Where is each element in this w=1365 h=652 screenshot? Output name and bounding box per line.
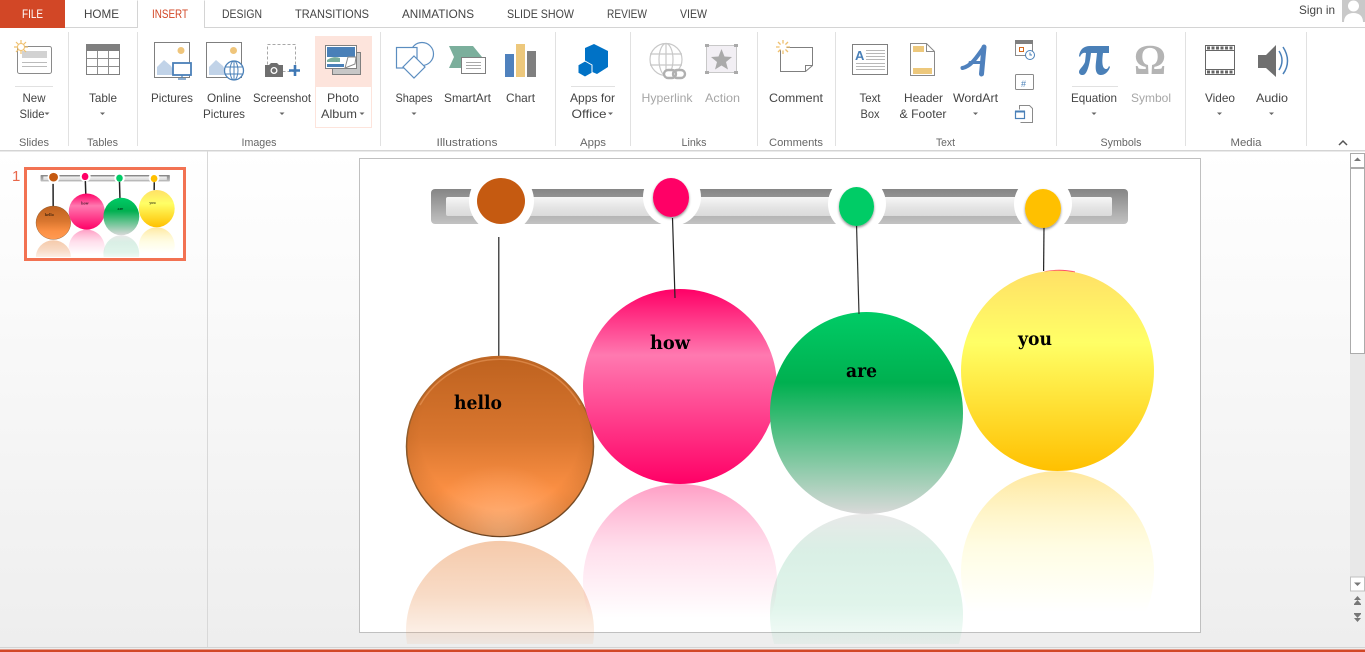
group: Text <box>852 40 1034 149</box>
group: Symbols <box>1071 38 1171 149</box>
group: Text: WordArt <box>953 91 999 105</box>
icon: SmartArt <box>449 46 486 74</box>
icon: comment <box>776 40 812 72</box>
group: Tables: Tables <box>87 137 118 149</box>
slide thumbnail: hello <box>45 213 54 217</box>
group: Images: Images <box>242 137 277 149</box>
icon: symbol omega: Ω <box>1134 38 1166 84</box>
icon: screenshot <box>265 44 300 77</box>
scroll down button <box>1350 577 1364 591</box>
group: Apps: Apps for <box>570 91 615 105</box>
string: how <box>672 218 675 298</box>
group: Text: Text <box>936 137 955 149</box>
group: Symbols: Symbol <box>1131 91 1171 105</box>
group: Slides: Slides <box>19 137 49 149</box>
icon: hyperlink <box>650 44 685 78</box>
peg: you <box>1025 189 1061 228</box>
ball: you: you <box>1017 328 1052 350</box>
group: Text: Box <box>860 107 880 121</box>
group: Comments: Comments <box>769 137 823 149</box>
string: you <box>1043 226 1045 271</box>
ball: how <box>583 289 777 484</box>
icon: shapes <box>396 42 434 78</box>
group: Illustrations: SmartArt <box>444 91 492 105</box>
string: are <box>856 224 859 314</box>
ball: hello <box>406 356 594 536</box>
group: Media: Video <box>1205 91 1235 105</box>
ball: how: how <box>650 332 691 354</box>
thumbnail panel divider <box>207 151 208 648</box>
group: Slides: New <box>22 91 46 105</box>
icon: object <box>1015 106 1032 122</box>
halo: hello peg <box>469 168 534 234</box>
peg: how <box>653 178 689 217</box>
tab bar: SLIDE SHOW <box>507 7 575 21</box>
icon: apps for office <box>578 44 608 77</box>
tab bar: DESIGN <box>222 7 262 21</box>
group: Links: Hyperlink <box>642 91 694 105</box>
slide thumbnail <box>26 168 184 260</box>
group: Media: Audio <box>1256 91 1288 105</box>
ball: are <box>770 312 963 514</box>
icon: photo album <box>326 46 360 74</box>
previous slide button <box>1354 596 1361 605</box>
icon: pictures <box>154 42 191 79</box>
group: Images: Online <box>207 91 241 105</box>
photo album button <box>315 36 372 128</box>
halo: you peg <box>1014 175 1072 233</box>
group: Media: Media <box>1230 137 1262 149</box>
scroll thumb <box>1350 168 1364 354</box>
icon: video <box>1205 46 1235 74</box>
icon: date and time <box>1015 40 1034 60</box>
group: Tables: Table <box>89 91 117 105</box>
group: Slides: Slide <box>20 107 45 121</box>
peg: hello <box>477 178 525 224</box>
scroll up button <box>1350 154 1364 168</box>
tab bar: ANIMATIONS <box>402 7 474 21</box>
active INSERT tab: INSERT <box>152 7 189 21</box>
halo: are peg <box>828 175 886 233</box>
group: Links: Action <box>705 91 740 105</box>
ribbon <box>0 28 1365 152</box>
status bar edge <box>0 647 1365 652</box>
peg: are <box>839 187 874 226</box>
group: Slides <box>14 40 52 149</box>
group: Images: Pictures <box>203 107 245 121</box>
photo album button: Album <box>321 107 357 121</box>
group: Links <box>642 44 740 149</box>
group: Illustrations <box>396 42 536 149</box>
icon: slide number <box>1016 74 1034 90</box>
slide canvas <box>360 158 1200 632</box>
slide thumbnail: you <box>149 201 156 205</box>
reflection: hello ball <box>406 541 594 644</box>
group: Symbols: Equation <box>1071 91 1117 105</box>
group: Tables <box>86 44 120 149</box>
group: Illustrations: Shapes <box>396 91 432 105</box>
slide number: 1 <box>12 168 20 185</box>
reflection: you ball <box>961 471 1154 615</box>
halo: how peg <box>643 168 701 226</box>
group: Apps: Apps <box>580 137 607 149</box>
active INSERT tab <box>138 0 204 29</box>
tab bar: TRANSITIONS <box>295 7 369 21</box>
group: Media <box>1205 45 1288 149</box>
FILE tab: FILE <box>22 7 43 21</box>
tab bar: HOME <box>84 7 119 21</box>
ball: you <box>961 270 1154 471</box>
tab bar: REVIEW <box>607 7 648 21</box>
reflection: are ball <box>770 514 963 644</box>
sign in and avatar: Sign in <box>1299 3 1335 17</box>
FILE tab <box>0 0 65 28</box>
workspace background <box>0 151 1365 648</box>
photo album button: Photo <box>327 91 359 105</box>
thumbnail panel <box>12 168 184 260</box>
icon: audio <box>1258 45 1288 77</box>
ball: are: are <box>846 360 877 382</box>
group: Comments <box>769 40 824 149</box>
icon: slide number: # <box>1021 79 1026 89</box>
group: Images <box>151 36 372 149</box>
next slide button <box>1354 613 1361 622</box>
group: Text: Text <box>860 91 881 105</box>
hanging bar <box>431 189 1128 224</box>
ball: hello: hello <box>454 392 502 414</box>
tab bar: VIEW <box>680 7 708 21</box>
slide thumbnail: are <box>118 207 124 211</box>
group: Apps: Office <box>572 107 607 121</box>
group: Illustrations: Chart <box>506 91 536 105</box>
group: Apps <box>570 44 615 149</box>
group: Illustrations: Illustrations <box>436 137 498 149</box>
icon: action <box>705 44 738 74</box>
icon: new slide <box>14 40 52 74</box>
group: Images: Pictures <box>151 91 193 105</box>
group: Symbols: Symbols <box>1100 137 1142 149</box>
tab bar <box>0 0 1365 29</box>
sign in and avatar <box>1299 0 1365 22</box>
reflection: how ball <box>583 484 777 620</box>
icon: online pictures <box>206 42 244 80</box>
group: Text: Header <box>904 91 943 105</box>
icon: WordArt <box>962 47 984 74</box>
group: Comments: Comment <box>769 91 824 105</box>
group: Links: Links <box>682 137 707 149</box>
icon: text box <box>852 44 888 74</box>
string: hello <box>498 237 500 358</box>
group: Images: Screenshot <box>253 91 312 105</box>
vertical scrollbar <box>1350 153 1365 622</box>
group: Text: & Footer <box>900 107 946 121</box>
icon: header and footer <box>910 44 934 76</box>
icon: equation pi <box>1079 46 1110 75</box>
icon: chart <box>505 44 536 77</box>
icon: table <box>86 44 120 74</box>
slide thumbnail: how <box>81 202 89 206</box>
icon: text box: A <box>855 48 865 63</box>
